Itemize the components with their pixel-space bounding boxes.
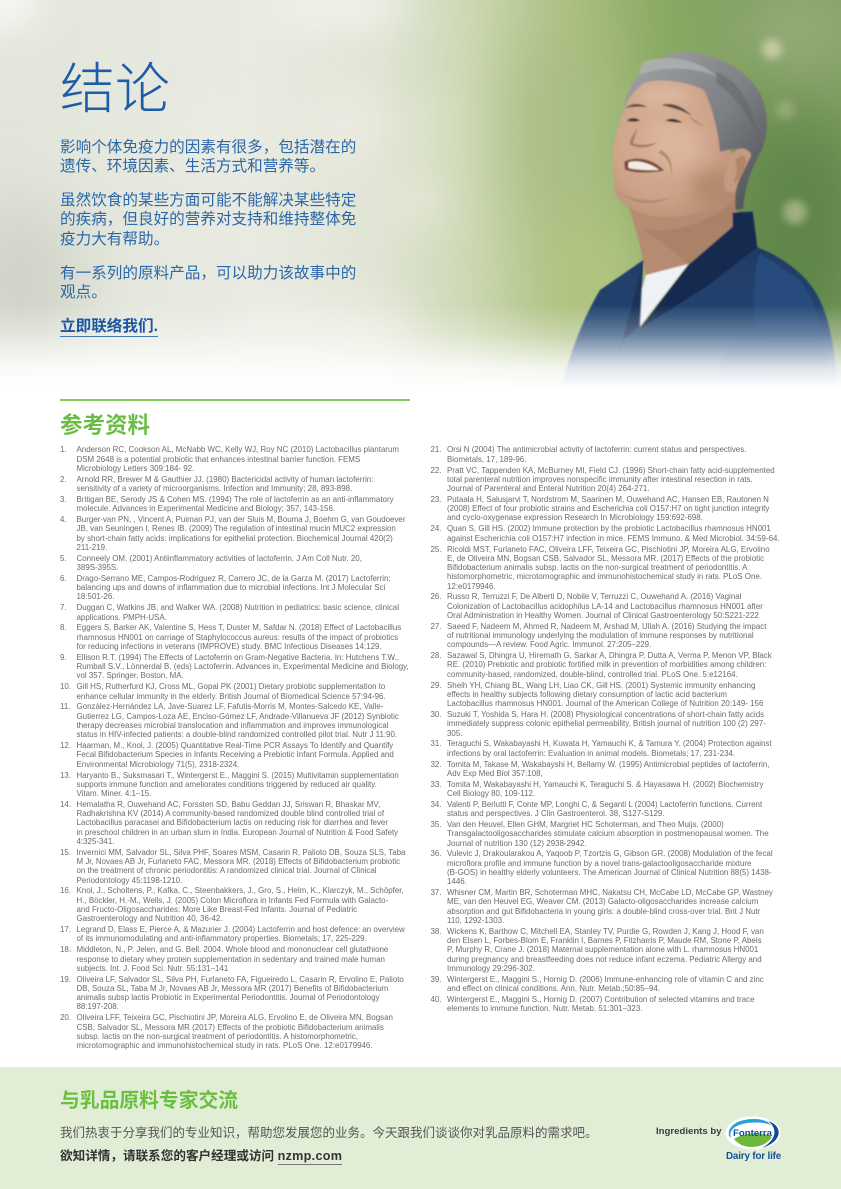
- hair: [624, 52, 767, 210]
- references column 1: by short-chain fatty acids: implications for epithelial protection. Biochemical Journal 420(2): [76, 534, 393, 543]
- references column 2: 36.: [430, 849, 442, 858]
- references column 2: 23.: [430, 495, 442, 504]
- references column 2: Whisner CM, Martin BR, Schoterman MHC, Nakatsu CH, McCabe LD, McCabe GP, Wastney: [447, 888, 773, 897]
- references column 2: 21.: [430, 445, 442, 454]
- references column 2: 1446.: [447, 877, 467, 886]
- references column 1: 211-219.: [76, 543, 107, 552]
- references column 1: enhance cellular immunity in the elderly. British Journal of Biomedical Science 57:94-96.: [76, 692, 386, 701]
- references column 1: sensitivity of a variety of microorganisms. Infection and Immunity; 28, 893-898.: [76, 484, 352, 493]
- references column 2: ME, van den Heuvel EG, Weaver CM. (2013) Galacto-oligosaccharides increase calcium: [447, 897, 758, 906]
- references column 1: González-Hernández LA, Jave-Suarez LF, Fafutis-Morris M, Montes-Salcedo KE, Valle-: [76, 702, 383, 711]
- references column 2: Sazawal S, Dhingra U, Hiremath G, Sarkar A, Dhingra P, Dutta A, Verma P, Menon VP, Black: [447, 651, 772, 660]
- white t-shirt: [638, 264, 688, 328]
- chin shadow: [617, 191, 673, 203]
- references column 2: 38.: [430, 927, 442, 936]
- references column 1: and Fructo-Oligosaccharides: More Like Breast-Fed Infants. Journal of Pediatric: [76, 905, 357, 914]
- references column 2: elements to immune function. Nutr. Metab. 51:301–323.: [447, 1004, 642, 1013]
- references column 2: community-based, randomized, double-blind, controlled trial. PLoS One. 5:e12164.: [447, 670, 738, 679]
- references column 1: Lactobacillus paracasei and Bifidobacterium lactis on reducing risk for diarrhea and fever: [76, 818, 388, 827]
- references column 1: Periodontology 45:1198-1210.: [76, 876, 182, 885]
- green divider line: [60, 399, 410, 400]
- references column 1: Conneely OM. (2001) Antiinflammatory activities of lactoferrin. J Am Coll Nutr. 20,: [76, 554, 362, 563]
- references column 2: Tomita M, Takase M, Wakabayshi H, Bellamy W. (1995) Antimicrobial peptides of lactoferrin,: [447, 760, 769, 769]
- references column 2: 35.: [430, 820, 442, 829]
- references column 1: 8.: [60, 623, 67, 632]
- text block: paragraph 2: [60, 192, 356, 248]
- references column 1: 18:501-26.: [76, 592, 114, 601]
- references column 2: microflora profile and immune function by a novel trans-galactooligosaccharide mixture: [447, 859, 751, 868]
- references column 2: Colonization of Lactobacillus acidophilus LA-14 and Lactobacillus rhamnosus HN001 after: [447, 602, 763, 611]
- references column 1: subsp. lactis on the non-surgical treatment of periodontitis. A histomorphometric,: [76, 1032, 358, 1041]
- references column 2: Wickens K, Barthow C, Mitchell EA, Stanley TV, Purdie G, Rowden J, Kang J, Hood F, van: [447, 927, 764, 936]
- references column 1: Radhakrishna KV (2014) A community-based randomized double blind controlled trial of: [76, 809, 384, 818]
- references column 2: Immunology 29:296-302.: [447, 964, 535, 973]
- eyebrows: [625, 104, 692, 116]
- references column 2: Van den Heuvel, Ellen GHM, Margriet HC Schoterman, and Theo Muijs. (2000): [447, 820, 724, 829]
- references column 2: during pregnancy and breastfeeding does not reduce infant eczema. Pediatric Allergy and: [447, 955, 762, 964]
- references column 2: and effect on clinical conditions. Ann. Nutr. Metab.;50:85–94.: [447, 984, 660, 993]
- icon: Fonterra logo: [726, 1116, 780, 1150]
- references column 2: E, de Oliveira MN, Bogsan CSB, Salvador SL, Messora MR. (2017) Effects of the probiotic: [447, 554, 764, 563]
- references column 1: Rumball S.V., Lönnerdal B. (eds) Lactoferrin. Advances in, Experimental Medicine and Biology,: [76, 662, 409, 671]
- references column 2: Tomita M, Wakabayashi H, Yamauchi K, Teraguchi S. & Hayasawa H. (2002) Biochemistry: [447, 780, 763, 789]
- title: 结论: [60, 44, 170, 124]
- references column 1: DB, Souza SL, Taba M Jr, Novaes AB Jr, Messora MR (2017) Benefits of Bifidobacterium: [76, 984, 388, 993]
- references column 2: 25.: [430, 545, 442, 554]
- references column 2: 31.: [430, 739, 442, 748]
- references column 1: Fecal Bifidobacterium Species in Infants Receiving a Prebiotic Infant Formula. Applied and: [76, 750, 394, 759]
- references column 1: M Jr, Novaes AB Jr, Furlaneto FAC, Messora MR. (2018) Effects of Bifidobacterium probiotic: [76, 857, 400, 866]
- references column 1: balancing ups and downs of inflammation due to microbial infections. Int J Molecular Sci: [76, 583, 385, 592]
- text block: paragraph 1: [60, 138, 356, 175]
- references column 1: 15.: [60, 848, 71, 857]
- text block: paragraph 2: 虽然饮食的某些方面可能不能解决某些特定: [60, 192, 356, 209]
- references column 1: on the treatment of chronic periodontitis: A randomized clinical trial. Journal of Clinical: [76, 866, 377, 875]
- references column 2: Orsi N (2004) The antimicrobial activity of lactoferrin: current status and perspectives.: [447, 445, 746, 454]
- references column 2: Putaala H, Salusjarvi T, Nordstrom M, Saarinen M, Ouwehand AC, Hansen EB, Rautonen N: [447, 495, 769, 504]
- nose: [630, 127, 657, 147]
- references column 1: 18.: [60, 945, 71, 954]
- references column 1: 16.: [60, 886, 71, 895]
- references column 2: 305.: [447, 729, 462, 738]
- references column 1: Haarman, M., Knol, J. (2005) Quantitative Real-Time PCR Assays To Identify and Quantify: [76, 741, 393, 750]
- references column 1: Environmental Microbiology 71(5), 2318-2324.: [76, 760, 239, 769]
- references column 1: rhamnosus HN001 on carriage of Staphylococcus aureus: results of the impact of probiotics: [76, 633, 398, 642]
- references column 1: JB, van Seuningen I, Renes IB. (2009) The regulation of intestinal mucin MUC2 expression: [76, 524, 396, 533]
- references column 1: 6.: [60, 574, 67, 583]
- references column 2: of nutritional immunology underlying the modulation of immune responses by nutritional: [447, 631, 754, 640]
- references column 1: DSM 2648 is a potential probiotic that enhances intestinal barrier function. FEMS: [76, 455, 360, 464]
- references column 1: Burger-van PN, , Vincent A, Puiman PJ, van der Sluis M, Bouma J, Boehm G, van Goudoever: [76, 515, 405, 524]
- face: [613, 72, 735, 217]
- references column 1: Knol, J., Scholtens, P., Kafka, C., Steenbakkers, J., Gro, S., Helm, K., Klarczyk, M., Schöpfer,: [76, 886, 404, 895]
- contact link: 立即联络我们.: [60, 318, 158, 334]
- references column 1: 2.: [60, 475, 67, 484]
- references column 1: Arnold RR, Brewer M & Gauthier JJ. (1980) Bactericidal activity of human lactoferrin:: [76, 475, 373, 484]
- references column 1: supports immune function and ameliorates conditions triggered by reduced air quality.: [76, 780, 377, 789]
- references column 2: Pratt VC, Tappenden KA, McBurney MI, Field CJ. (1996) Short-chain fatty acid-supplemented: [447, 466, 775, 475]
- references column 1: 9.: [60, 653, 67, 662]
- references column 1: Gill HS, Rutherfurd KJ, Cross ML, Gopal PK (2001) Dietary probiotic supplementation to: [76, 682, 385, 691]
- references column 2: Ricoldi MST, Furlaneto FAC, Oliveira LFF, Teixeira GC, Pischiotini JP, Moreira ALG, Ervolino: [447, 545, 770, 554]
- references column 1: Oliveira LF, Salvador SL, Silva PH, Furlaneto FA, Figueiredo L, Casarin R, Ervolino E, Palioto: [76, 975, 404, 984]
- references column 1: 13.: [60, 771, 71, 780]
- references column 2: infections by oral lactoferrin: Evaluation in animal models. Biometals; 17, 231-234.: [447, 749, 735, 758]
- wrinkles: [659, 117, 705, 180]
- teeth: [628, 161, 659, 170]
- references column 1: [60, 445, 409, 1050]
- references column 1: 11.: [60, 702, 70, 711]
- references column 1: Eggers S, Barker AK, Valentine S, Hess T, Duster M, Safdar N. (2018) Effect of Lactobacillus: [76, 623, 401, 632]
- references column 2: Quan S, Gill HS. (2002) Immune protection by the probiotic Lactobacillus rhamnosus HN001: [447, 524, 771, 533]
- footer body text: 我们热衷于分享我们的专业知识，帮助您发展您的业务。今天跟我们谈谈你对乳品原料的需求吧。: [60, 1126, 598, 1140]
- references column 2: histomorphometric, microtomographic and immunohistochemical study in rats. PLoS One.: [447, 572, 762, 581]
- man: [560, 52, 838, 390]
- references column 2: (B-GOS) in healthy elderly volunteers. The American Journal of Clinical Nutrition 88(5) 1438-: [447, 868, 772, 877]
- references column 1: Microbiology Letters 309:184- 92.: [76, 464, 194, 473]
- references column 2: Bifidobacterium animalis subsp. lactis on the non-surgical treatment of periodontitis. A: [447, 563, 747, 572]
- references column 1: subjects. Int. J. Food Sci. Nutr. 55:131–141: [76, 964, 228, 973]
- text block: paragraph 3: [60, 264, 356, 301]
- references column 1: Oliveira LFF, Teixeira GC, Pischiotini JP, Moreira ALG, Ervolino E, de Oliveira MN, Bogsan: [76, 1013, 393, 1022]
- references column 1: 4:325-341.: [76, 837, 114, 846]
- references column 1: 12.: [60, 741, 71, 750]
- references column 2: 39.: [430, 975, 442, 984]
- references column 2: Suzuki T, Yoshida S, Hara H. (2008) Physiological concentrations of short-chain fatty acids: [447, 710, 764, 719]
- references column 1: 17.: [60, 925, 71, 934]
- references column 1: 10.: [60, 682, 71, 691]
- references column 1: Legrand D, Elass E, Pierce A, & Mazurier J. (2004) Lactoferrin and host defence: an overview: [76, 925, 405, 934]
- text block: paragraph 2: 疫力大有帮助。: [60, 231, 169, 248]
- references column 1: microtomographic and immunohistochemical study in rats. PLoS One. 12:e0179946.: [76, 1041, 373, 1050]
- footer heading: 与乳品原料专家交流: [60, 1090, 238, 1112]
- references column 2: Sheih YH, Chiang BL, Wang LH, Liao CK, Gill HS. (2001) Systemic immunity enhancing: [447, 681, 755, 690]
- mouth: [624, 159, 664, 173]
- references column 2: Valenti P, Berlutti F, Conte MP, Longhi C, & Seganti L (2004) Lactoferrin functions. Current: [447, 800, 762, 809]
- jacket shading: [617, 260, 643, 360]
- references column 1: 389S-395S.: [76, 563, 118, 572]
- references column 2: RE. (2010) Prebiotic and probiotic fortified milk in prevention of morbidities among children:: [447, 660, 766, 669]
- references column 1: vol 357. Springer, Boston, MA.: [76, 671, 184, 680]
- references column 2: Teraguchi S, Wakabayashi H, Kuwata H, Yamauchi K, & Tamura Y. (2004) Protection against: [447, 739, 772, 748]
- panel: footer contact band: [0, 1067, 841, 1189]
- references column 2: [430, 445, 780, 1013]
- references column 1: Middleton, N., P. Jelen, and G. Bell. 2004. Whole blood and mononuclear cell glutathione: [76, 945, 388, 954]
- references column 2: 22.: [430, 466, 442, 475]
- text block: paragraph 1: 影响个体免疫力的因素有很多，包括潜在的: [60, 138, 356, 156]
- references column 2: effects in healthy subjects following dietary consumption of lactic acid bacterium: [447, 690, 727, 699]
- face highlights: [633, 87, 730, 203]
- references column 1: response to dietary whey protein supplementation in sedentary and trained male human: [76, 955, 385, 964]
- references column 2: 12:e0179946.: [447, 582, 496, 591]
- references column 1: therapy decreases microbial translocation and inflammation and improves immunological: [76, 721, 388, 730]
- references column 2: 27.: [430, 622, 442, 631]
- references column 1: Vitam. Miner. 4:1–15.: [76, 789, 151, 798]
- references column 2: against Escherichia coli O157:H7 infection in mice. FEMS Immuno. & Med Microbiol. 34:59-64.: [447, 534, 780, 543]
- references column 2: status and perspectives. J Clin Gastroenterol. 38, S127-S129.: [447, 809, 665, 818]
- references column 2: Lactobacillus rhamnosus HN001. Journal of the American College of Nutrition 20:149- 156: [447, 699, 763, 708]
- references column 2: 37.: [430, 888, 442, 897]
- references column 2: Biometals, 17, 189-96.: [447, 455, 526, 464]
- references column 2: 28.: [430, 651, 442, 660]
- references column 2: den Elsen L, Forbes-Blom E, Franklin I, Barnes P, Fitzharris P, Maude RM, Stone P, Abels: [447, 936, 762, 945]
- references heading: 参考资料: [60, 413, 150, 438]
- references column 2: Journal of nutrition 130 (12) 2938-2942.: [447, 839, 586, 848]
- references column 2: 33.: [430, 780, 442, 789]
- references column 1: CSB, Salvador SL, Messora MR (2017) Effects of the probiotic Bifidobacterium animalis: [76, 1023, 384, 1032]
- references column 2: 34.: [430, 800, 442, 809]
- references column 1: Hemalatha R, Ouwehand AC, Forssten SD, Babu Geddan JJ, Sriswan R, Bhaskar MV,: [76, 800, 380, 809]
- references column 1: H., Böckler, H.-M., Wells, J. (2005) Colon Microflora in Infants Fed Formula with Galacto-: [76, 896, 388, 905]
- references column 1: molecule. Advances in Experimental Medicine and Biology; 357, 143-156.: [76, 504, 335, 513]
- references column 1: 7.: [60, 603, 67, 612]
- references column 2: 26.: [430, 592, 442, 601]
- references column 2: Vulevic J, Drakoularakou A, Yaqoob P, Tzortzis G, Gibson GR. (2008) Modulation of the fecal: [447, 849, 773, 858]
- references column 1: status in HIV-infected patients: a double-blind randomized controlled pilot trial. Nutr J 11:90.: [76, 730, 397, 739]
- references column 1: Drago-Serrano ME, Campos-Rodriguez R, Carrero JC, de la Garza M. (2017) Lactoferrin:: [76, 574, 391, 583]
- text block: paragraph 3: 有一系列的原料产品，可以助力该故事中的: [60, 264, 356, 282]
- references column 2: Saeed F, Nadeem M, Ahmed R, Nadeem M, Arshad M, Ullah A. (2016) Studying the impact: [447, 622, 766, 631]
- references column 2: absorption and gut Bifidobacteria in young girls: a double-blind cross-over trial. Brit J Nutr: [447, 907, 760, 916]
- references column 1: 19.: [60, 975, 71, 984]
- hero photo: smiling man against green foliage: [0, 0, 841, 384]
- references column 1: in preschool children in an urban slum in India. European Journal of Nutrition & Food Safety: [76, 828, 398, 837]
- references column 2: immediately suppress colonic epithelial permeability. British journal of nutrition 100 (2) 297-: [447, 719, 766, 728]
- references column 2: 24.: [430, 524, 442, 533]
- references column 1: for reducing infections in veterans (IMPROVE) study. BMC Infectious Diseases 14:129.: [76, 642, 382, 651]
- Ingredients by label: Ingredients by: [656, 1126, 722, 1137]
- references column 1: Duggan C, Watkins JB, and Walker WA. (2008) Nutrition in pediatrics: basic science, clinical: [76, 603, 399, 612]
- references column 1: Gastroenterology and Nutrition 40, 36-42.: [76, 914, 223, 923]
- neck: [628, 187, 737, 278]
- text block: paragraph 1: 遗传、环境因素、生活方式和营养等。: [60, 158, 325, 175]
- soft bokeh highlights: [0, 0, 448, 360]
- references column 2: 32.: [430, 760, 442, 769]
- references column 1: of its immunomodulating and anti-inflammatory properties. Biometals; 17, 225-229.: [76, 934, 367, 943]
- references column 2: 29.: [430, 681, 442, 690]
- references column 1: animalis subsp lactis Probiotic in Experimental Periodontitis. Journal of Periodontology: [76, 993, 380, 1002]
- ear: [724, 148, 752, 193]
- references column 2: Wintergerst E., Maggini S., Hornig D. (2007) Contribution of selected vitamins and trace: [447, 995, 754, 1004]
- references column 1: Invernici MM, Salvador SL, Silva PHF, Soares MSM, Casarin R, Palioto DB, Souza SLS, Taba: [76, 848, 405, 857]
- references column 2: (2008) Effect of four probiotic strains and Escherichia coli O157:H7 on tight junction integrity: [447, 504, 769, 513]
- references column 2: 30.: [430, 710, 442, 719]
- references column 1: Haryanto B., Suksmasari T., Wintergerst E., Maggini S. (2015) Multivitamin supplementation: [76, 771, 399, 780]
- references column 1: 3.: [60, 495, 67, 504]
- footer call to action: 欲知详情，请联系您的客户经理或访问 nzmp.com: [60, 1149, 342, 1163]
- references column 2: and cyclo-oxygenase expression Research In Microbiology 159:692-698.: [447, 513, 703, 522]
- references column 1: Ellison R.T. (1994) The Effects of Lactoferrin on Gram-Negative Bacteria. In: Hutchens T.W.,: [76, 653, 399, 662]
- references column 1: 14.: [60, 800, 71, 809]
- references column 2: Adv Exp Med Biol 357:108,: [447, 769, 543, 778]
- eyes: [627, 118, 683, 123]
- references column 2: Transgalactooligosaccharides stimulate calcium absorption in postmenopausal women. The: [447, 829, 769, 838]
- references column 1: 1.: [60, 445, 67, 454]
- references column 2: 40.: [430, 995, 442, 1004]
- references column 2: compounds—A review. Food Agric. Immunol. 27:205–229.: [447, 640, 651, 649]
- text block: paragraph 3: 观点。: [60, 284, 107, 301]
- references column 1: 88:197-208.: [76, 1002, 119, 1011]
- references column 2: Cell Biology 80, 109-112.: [447, 789, 535, 798]
- references column 2: Russo R, Terruzzi F, De Alberti D, Nobile V, Terruzzi C, Ouwehand A. (2016) Vaginal: [447, 592, 741, 601]
- references column 2: Wintergerst E., Maggini S., Hornig D. (2006) Immune-enhancing role of vitamin C and zinc: [447, 975, 764, 984]
- tagline: Dairy for life: Dairy for life: [726, 1151, 781, 1162]
- icon: Fonterra logo: Fonterra: [733, 1128, 773, 1139]
- references column 2: P, Murphy R, Crane J. (2018) Maternal supplementation alone with L. rhamnosus HN001: [447, 945, 758, 954]
- text block: paragraph 2: 的疾病，但良好的营养对支持和维持整体免: [60, 211, 356, 228]
- references column 2: Oral Administration in Healthy Women. Journal of Clinical Gastroenterology 50:S221-222: [447, 611, 759, 620]
- references column 1: Anderson RC, Cookson AL, McNabb WC, Kelly WJ, Roy NC (2010) Lactobacillus plantarum: [76, 445, 399, 454]
- references column 1: 5.: [60, 554, 67, 563]
- references column 2: 110, 1292-1303.: [447, 916, 504, 925]
- references column 1: 20.: [60, 1013, 71, 1022]
- references column 1: applications. PMPH-USA.: [76, 613, 167, 622]
- jacket: [560, 212, 838, 390]
- references column 1: Gutierrez LG, Campos-Loza AE, Enciso-Gómez LF, Andrade-Villanueva JF (2012) Synbiotic: [76, 712, 399, 721]
- references column 2: total parenteral nutrition improves nonspecific immunity after intestinal resection in rats.: [447, 475, 753, 484]
- references column 2: Journal of Parenteral and Enteral Nutrition 20(4) 264-271.: [447, 484, 650, 493]
- references column 1: Britigan BE, Serody JS & Cohen MS. (1994) The role of lactoferrin as an anti-inflammatory: [76, 495, 394, 504]
- references column 1: 4.: [60, 515, 67, 524]
